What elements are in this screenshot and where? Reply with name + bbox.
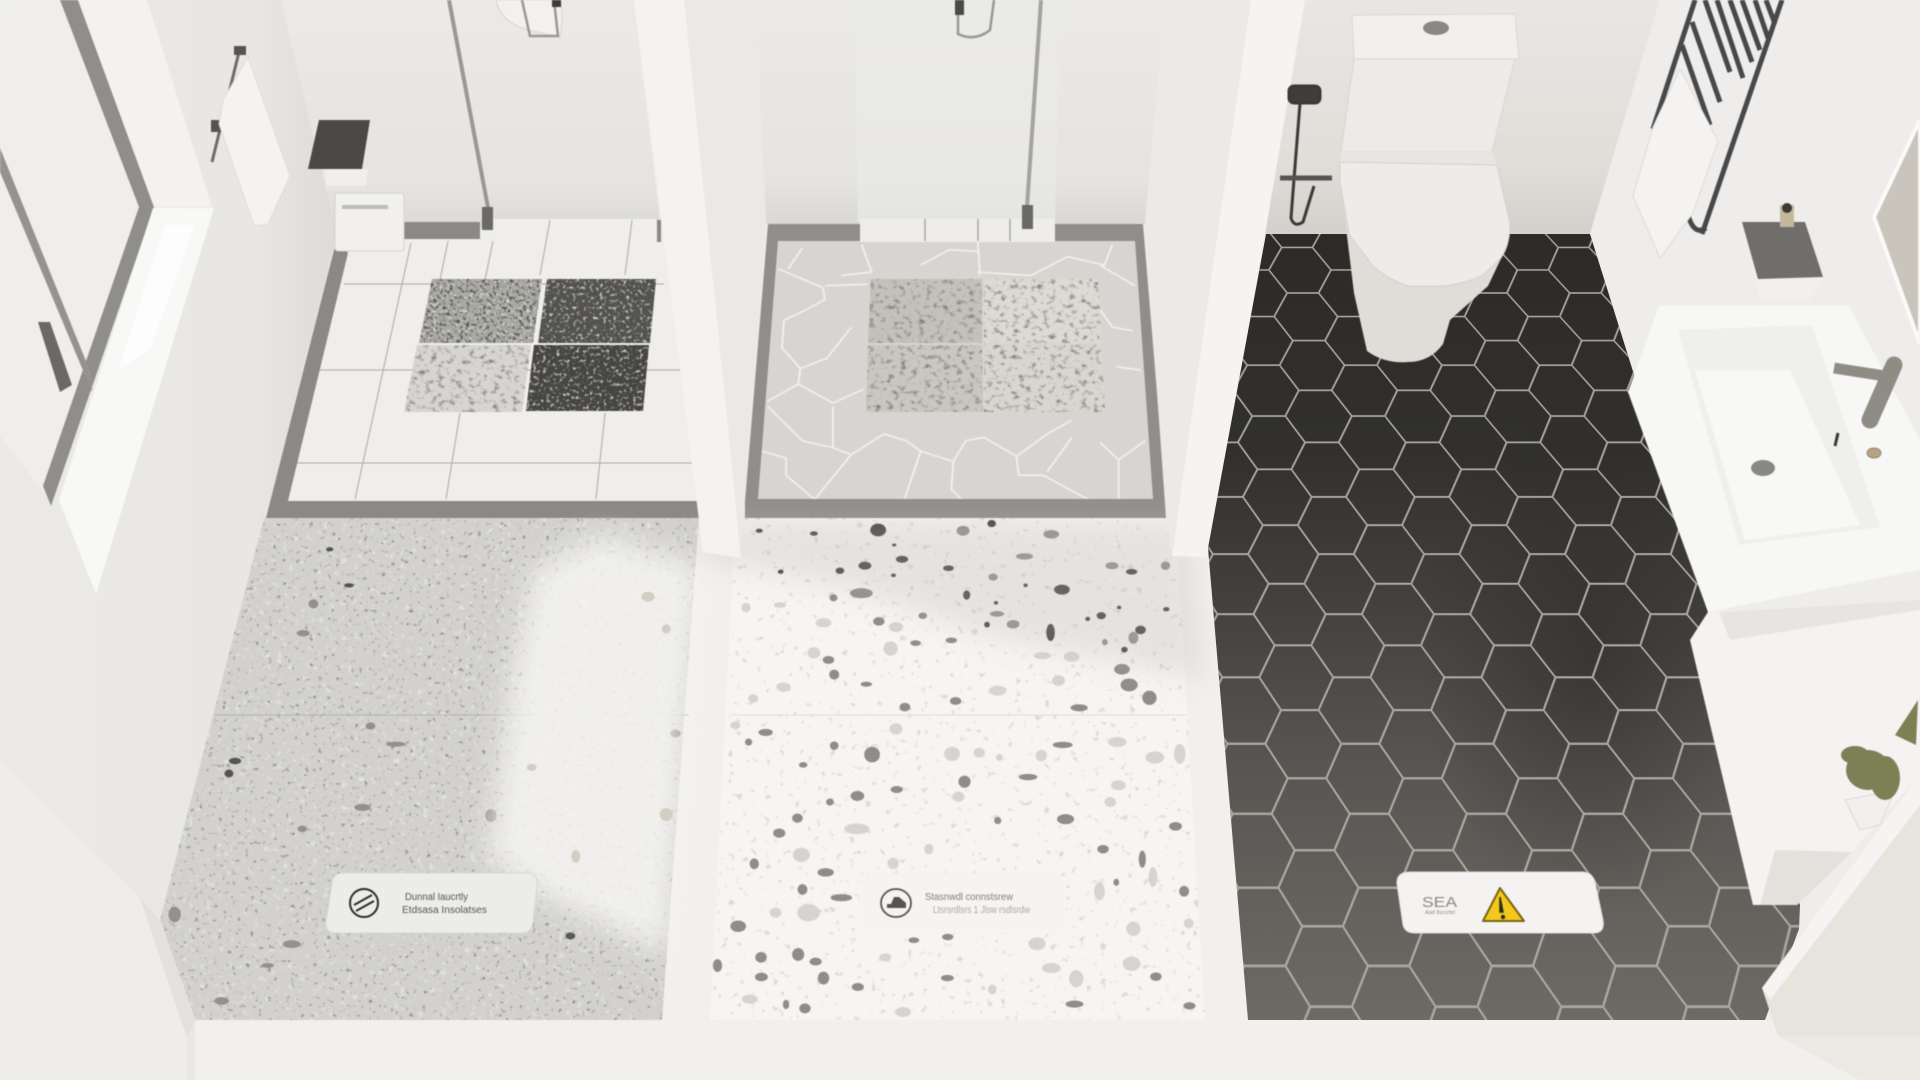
sample tile: stone four bbox=[984, 345, 1105, 412]
toilet seat lid bbox=[1340, 162, 1510, 286]
drain bbox=[1751, 460, 1775, 476]
ladder towel radiator bbox=[1653, 0, 1782, 234]
icon: yellow warning triangle bbox=[1483, 888, 1524, 921]
waste bin bbox=[335, 193, 404, 251]
potted plant bbox=[1841, 700, 1918, 830]
sample tile: stone two bbox=[984, 279, 1102, 343]
left wall bbox=[0, 0, 337, 1080]
towel on radiator bbox=[1633, 69, 1718, 258]
window bbox=[0, 0, 214, 594]
gray frame bbox=[745, 224, 1166, 518]
pier between rooms two and three bbox=[1145, 0, 1305, 557]
gray frame bbox=[266, 220, 700, 518]
light chips bbox=[730, 602, 1194, 1017]
panel: gray terrazzo floor bbox=[160, 518, 702, 1020]
stone surface bbox=[758, 241, 1153, 500]
label text: Aad llsccrtst bbox=[1425, 910, 1456, 916]
sample tile: dark terrazzo top bbox=[538, 279, 656, 343]
back wall: room one bbox=[281, 0, 660, 234]
cistern body bbox=[1341, 59, 1515, 152]
shower fittings: room two bbox=[955, 0, 1041, 229]
bottom floor strip bbox=[160, 518, 1920, 1080]
corner wall: lower right bbox=[1762, 774, 1920, 1080]
label: dark hexagon floor bbox=[1397, 872, 1603, 933]
label text bbox=[925, 892, 1031, 916]
panel: white tile shower floor bbox=[266, 219, 700, 518]
tile joint bbox=[215, 714, 689, 716]
terrazzo sunlit chips bbox=[527, 592, 673, 863]
faucet bbox=[1834, 365, 1894, 420]
soap shelf bbox=[1742, 203, 1823, 300]
mid gray chips bbox=[713, 526, 1196, 1013]
icon: no-slip badge bbox=[350, 889, 378, 917]
terrazzo surface bbox=[160, 518, 699, 1020]
sample tile: light terrazzo bbox=[404, 345, 531, 412]
back tiles bbox=[860, 219, 1055, 242]
label text: Ltsrsrdlsrs 1 Jlsw rsdlsrdw bbox=[933, 905, 1031, 916]
label text: Etdsasa Insolatses bbox=[402, 905, 487, 916]
label: gray terrazzo bbox=[326, 873, 537, 933]
sunlight patch bbox=[488, 535, 702, 955]
back wall: room two bbox=[755, 0, 1166, 224]
hinge strip bbox=[1340, 152, 1497, 165]
panel: white terrazzo floor bbox=[700, 518, 1205, 1020]
label: white terrazzo bbox=[859, 873, 1063, 933]
label text bbox=[402, 892, 487, 916]
dark chips bbox=[756, 520, 1169, 652]
terrazzo surface bbox=[710, 518, 1205, 1020]
flush button bbox=[1423, 21, 1449, 35]
tile joints bbox=[297, 220, 695, 499]
wall mirror bbox=[1874, 120, 1920, 344]
toilet bowl bbox=[1343, 203, 1506, 362]
cabinet below sink bbox=[1690, 600, 1920, 905]
sample tile: stone one bbox=[868, 279, 982, 343]
tile surface bbox=[288, 219, 700, 501]
toilet bbox=[1340, 14, 1519, 362]
label text: Dunnal Iaucrtly bbox=[405, 892, 468, 903]
sample tile: stone three bbox=[866, 345, 983, 412]
back wall: room three bbox=[1265, 0, 1660, 234]
basin rim bbox=[1628, 306, 1920, 612]
stone cracks bbox=[762, 241, 1145, 499]
label text bbox=[1422, 894, 1457, 916]
sample tile: dark terrazzo bottom bbox=[526, 345, 649, 411]
brass fitting bbox=[1867, 448, 1881, 458]
label text: Stasnwdl connstsrew bbox=[925, 892, 1014, 903]
label text: SEA bbox=[1422, 894, 1457, 911]
shower fittings: room one bbox=[449, 0, 562, 230]
overflow slit bbox=[1835, 433, 1838, 446]
cistern lid bbox=[1352, 14, 1519, 59]
sample tile: gray terrazzo bbox=[419, 279, 542, 343]
panel: dark hexagon tile floor bbox=[1208, 234, 1800, 1020]
right wall bbox=[1590, 0, 1920, 905]
panel: stone shower floor bbox=[745, 219, 1166, 518]
shadow band bbox=[700, 518, 1205, 680]
hexagon tile grid bbox=[1208, 234, 1800, 1020]
basin bowl bbox=[1678, 325, 1880, 545]
sprayer and hose bbox=[1280, 86, 1332, 224]
pier between rooms one and two bbox=[634, 0, 766, 558]
icon: slip warning badge bbox=[881, 889, 911, 917]
wall shelf box bbox=[308, 120, 370, 186]
tile joint bbox=[730, 714, 1186, 716]
washbasin bbox=[1628, 306, 1920, 612]
terrazzo large chips bbox=[169, 547, 681, 1005]
bottom left pillar bbox=[0, 760, 195, 1080]
towel rail and towel: left wall bbox=[211, 46, 290, 226]
